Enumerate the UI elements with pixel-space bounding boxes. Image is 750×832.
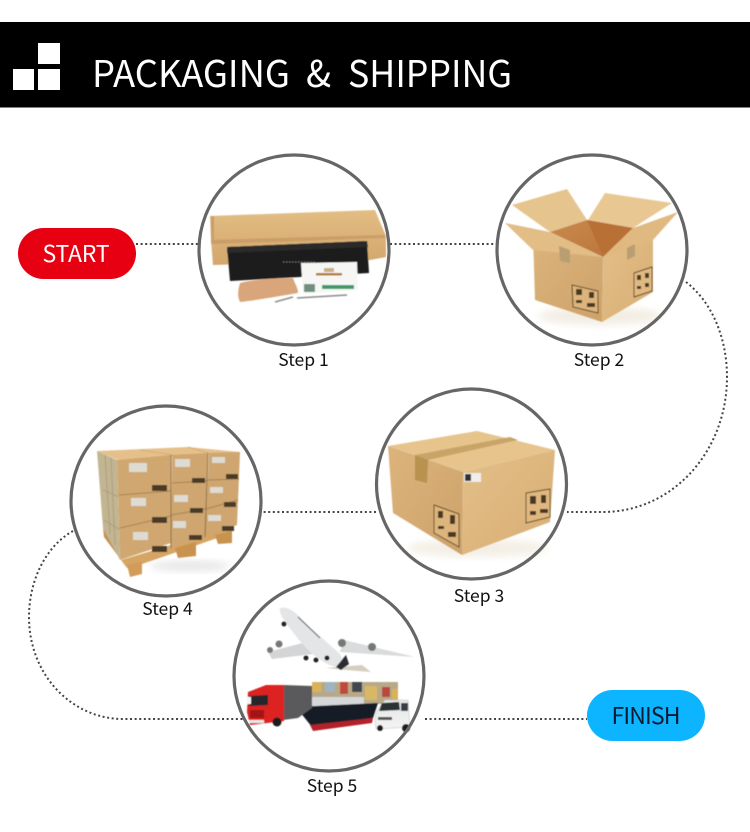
panel: step 1 [199, 155, 389, 372]
pallet [103, 527, 232, 577]
photo: plane, truck, cargo ship and van [247, 608, 415, 732]
label: step 1: Step 1 [278, 347, 329, 372]
header banner [0, 22, 750, 108]
panel: step 2 [497, 155, 687, 372]
label: step 5: Step 5 [307, 773, 357, 798]
title: SHIPPING [348, 44, 512, 98]
carton labels [129, 457, 225, 540]
start pill: START [42, 235, 110, 269]
circle outline [497, 155, 687, 345]
title: & [306, 44, 331, 98]
truck [247, 685, 312, 726]
label: step 2: Step 2 [574, 347, 624, 372]
dotted route connector [29, 244, 727, 719]
van [375, 700, 410, 732]
panel: step 3 [376, 389, 566, 608]
photo: sealed cardboard box [388, 431, 555, 557]
circle outline [234, 581, 424, 771]
box handling marks [572, 285, 598, 313]
panel: step 4 [71, 406, 261, 621]
circle outline [199, 155, 389, 345]
photo: open cardboard box [505, 189, 678, 325]
box handling marks [434, 505, 459, 547]
circle outline [376, 389, 566, 579]
airplane [267, 608, 415, 672]
photo: long mailer box with black case and card [210, 210, 386, 302]
label: step 4: Step 4 [142, 596, 193, 621]
title: PACKAGING [92, 44, 290, 98]
icon: three squares [13, 43, 60, 90]
photo: pallet stacked with cartons [97, 447, 240, 577]
finish pill [587, 690, 705, 741]
label: step 3: Step 3 [454, 583, 504, 608]
cargo ship [296, 697, 378, 731]
panel: step 5 [234, 581, 424, 798]
containers [312, 682, 398, 704]
start pill [18, 228, 136, 279]
circle outline [71, 406, 261, 596]
finish pill: FINISH [612, 697, 680, 731]
